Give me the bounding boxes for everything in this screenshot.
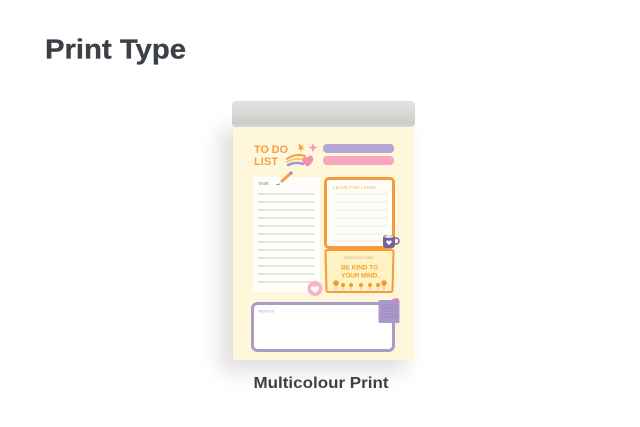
label: task: TASK bbox=[258, 181, 269, 186]
label: reminder: REMINDER ONE: bbox=[344, 256, 374, 260]
notepad bbox=[220, 101, 415, 372]
label: leave for later: LEAVE FOR LATER bbox=[333, 185, 377, 191]
paper sheet bbox=[233, 122, 414, 360]
top binding bbox=[232, 101, 415, 127]
panel: leave for later bbox=[326, 178, 394, 248]
task lines bbox=[258, 194, 314, 282]
icon: sparkles bbox=[298, 143, 318, 152]
panel: reminder bbox=[326, 250, 394, 292]
quote: BE KIND TO bbox=[341, 264, 378, 272]
caption: Multicolour Print bbox=[254, 375, 388, 392]
icon: rainbow with heart bbox=[287, 155, 313, 166]
field: purple label bbox=[323, 144, 394, 153]
label: notes: NOTES bbox=[259, 308, 274, 314]
paper shadow bbox=[220, 128, 406, 372]
icon: purple mug bbox=[383, 235, 399, 248]
heading: to do list bbox=[254, 144, 288, 168]
heading: to do list: TO DO bbox=[254, 144, 288, 156]
quote: YOUR MIND. bbox=[341, 272, 379, 280]
icon: pink heart badge bbox=[308, 281, 322, 296]
panel: task list bbox=[253, 177, 320, 292]
panel: notes bbox=[252, 304, 394, 350]
field: pink label bbox=[323, 156, 394, 165]
icon: pencil bbox=[276, 172, 292, 185]
notepad artwork bbox=[232, 101, 415, 360]
later lines bbox=[333, 194, 388, 241]
flowers bbox=[333, 280, 387, 290]
icon: sticky note bbox=[378, 298, 400, 323]
quote bbox=[341, 264, 379, 280]
title: Print Type bbox=[45, 34, 186, 64]
heading: to do list: LIST bbox=[254, 156, 278, 168]
